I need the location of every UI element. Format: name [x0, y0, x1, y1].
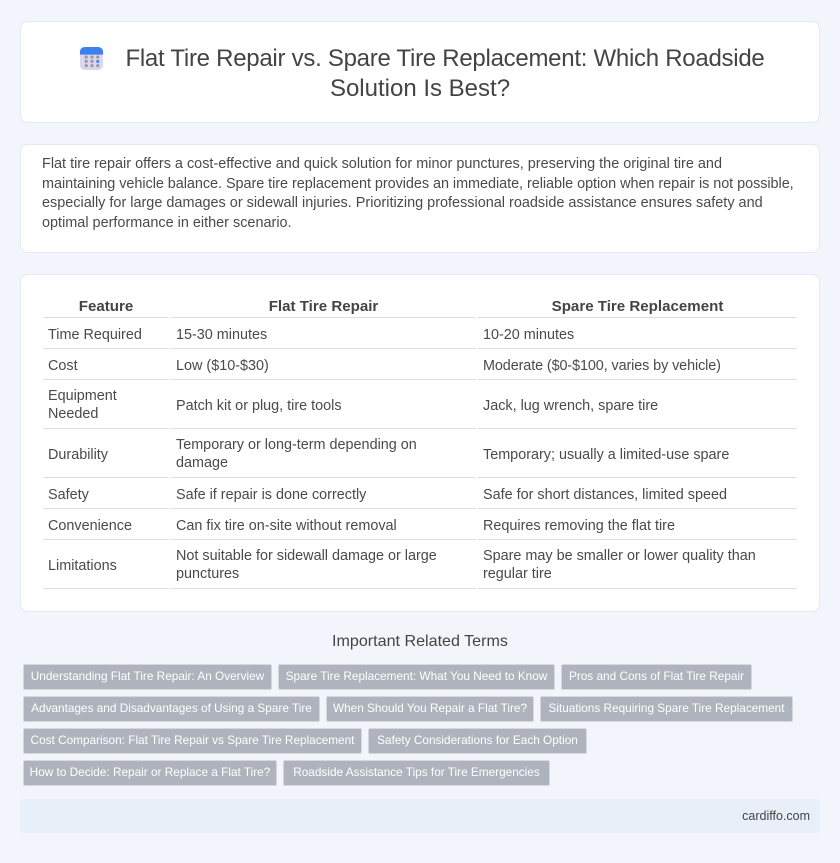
row: equipment needed: Needed [48, 406, 98, 422]
intro text [42, 156, 794, 230]
header row: Spare Tire Replacement [552, 298, 723, 315]
intro panel [20, 144, 820, 253]
row: convenience [48, 518, 675, 534]
title: Solution Is Best? [330, 75, 510, 102]
related terms heading: Important Related Terms [332, 632, 508, 650]
row: equipment needed: Jack, lug wrench, spare tire [483, 398, 658, 414]
row: convenience: Can fix tire on-site without removal [176, 518, 397, 534]
row: convenience: Convenience [48, 518, 132, 534]
intro text: optimal performance in either scenario. [42, 214, 292, 230]
intro text: Flat tire repair offers a cost-effective and quick solution for minor punctures, preserving the original tire and [42, 156, 722, 172]
related term tags: Spare Tire Replacement: What You Need to Know [286, 669, 547, 683]
row: limitations [48, 548, 756, 582]
header row: Flat Tire Repair [269, 298, 378, 315]
row: time required: 15-30 minutes [176, 327, 267, 343]
row: cost [48, 358, 721, 374]
related term tags: Situations Requiring Spare Tire Replacement [548, 701, 785, 715]
row: durability: Temporary; usually a limited-use spare [483, 447, 729, 463]
row: limitations: regular tire [483, 566, 552, 582]
row: convenience: Requires removing the flat tire [483, 518, 675, 534]
row: time required: Time Required [48, 327, 142, 343]
related term tags: When Should You Repair a Flat Tire? [333, 701, 527, 715]
row: time required [48, 327, 574, 343]
icon: calendar [80, 47, 104, 70]
title: Flat Tire Repair vs. Spare Tire Replacement: Which Roadside [125, 45, 764, 72]
row: durability: Temporary or long-term depending on [176, 437, 417, 453]
related term tags: Safety Considerations for Each Option [377, 733, 578, 747]
title [125, 45, 764, 102]
intro text: maintaining vehicle balance. Spare tire replacement provides an immediate, reliable option when repair is not possible, [42, 176, 794, 192]
header row [79, 298, 724, 315]
row: limitations: Limitations [48, 558, 117, 574]
related term tags: Pros and Cons of Flat Tire Repair [569, 669, 744, 683]
row: limitations: Not suitable for sidewall damage or large [176, 548, 437, 564]
row: cost: Cost [48, 358, 78, 374]
row: cost: Moderate ($0-$100, varies by vehicle) [483, 358, 721, 374]
row: equipment needed: Equipment [48, 388, 117, 404]
related term tags: Understanding Flat Tire Repair: An Overview [31, 669, 264, 683]
row: limitations: Spare may be smaller or lower quality than [483, 548, 756, 564]
related term tags: Roadside Assistance Tips for Tire Emergencies [293, 765, 540, 779]
row: durability: damage [176, 455, 228, 471]
footer bar [20, 799, 820, 833]
row: equipment needed [48, 388, 658, 422]
related term tags: Advantages and Disadvantages of Using a Spare Tire [31, 701, 312, 715]
header panel [20, 21, 820, 123]
row: limitations: punctures [176, 566, 239, 582]
row: durability: Durability [48, 447, 108, 463]
row: durability [48, 437, 729, 471]
related term tags: Cost Comparison: Flat Tire Repair vs Spare Tire Replacement [31, 733, 354, 747]
row: cost: Low ($10-$30) [176, 358, 269, 374]
row: safety: Safety [48, 487, 89, 503]
footer site name: cardiffo.com [742, 809, 810, 823]
row: safety: Safe for short distances, limited speed [483, 487, 727, 503]
row: equipment needed: Patch kit or plug, tire tools [176, 398, 342, 414]
comparison table panel [20, 274, 820, 612]
intro text: especially for large damages or sidewall injuries. Prioritizing professional roadside assistance ensures safety and [42, 195, 763, 211]
header row: Feature [79, 298, 133, 315]
row: safety: Safe if repair is done correctly [176, 487, 366, 503]
row: time required: 10-20 minutes [483, 327, 574, 343]
related term tags: How to Decide: Repair or Replace a Flat Tire? [30, 765, 270, 779]
comparison table [43, 298, 797, 589]
related term tags [23, 664, 793, 786]
row: safety [48, 487, 727, 503]
